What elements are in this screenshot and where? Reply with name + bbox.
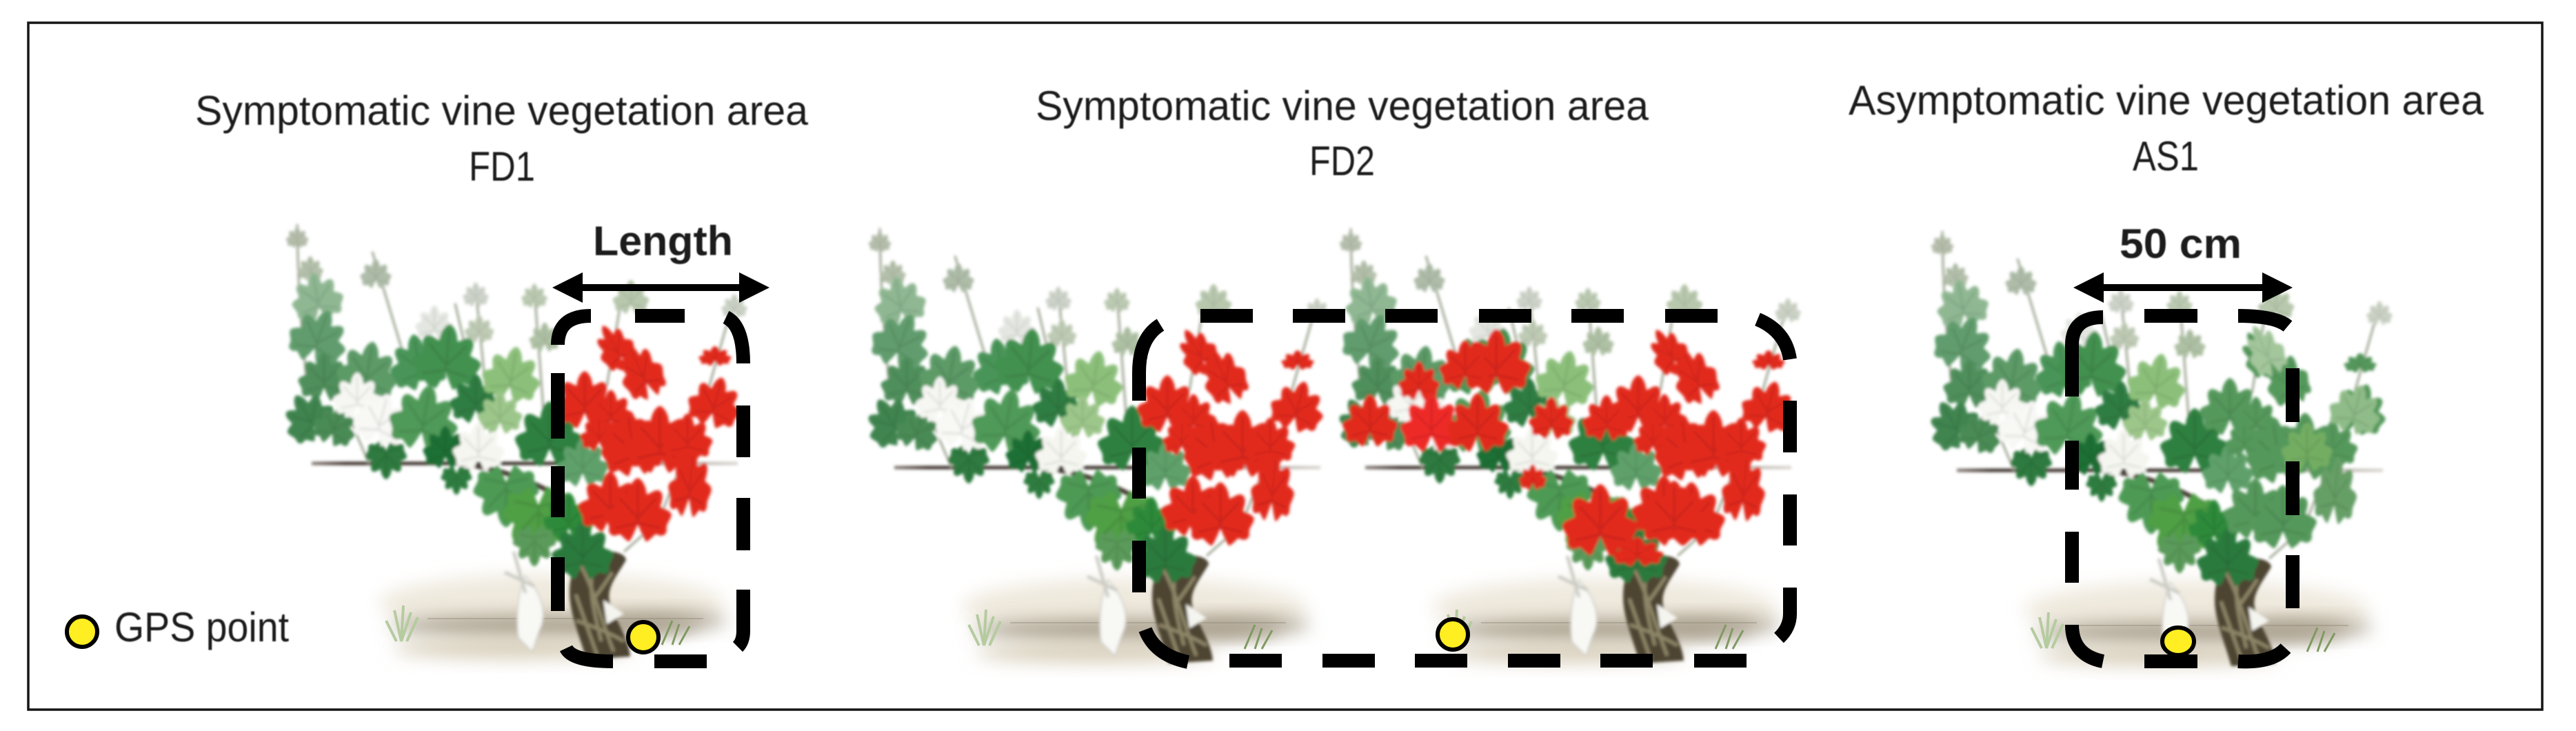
dashed vegetation area FD1: [558, 316, 743, 661]
heading: AS1: AS1: [2133, 133, 2199, 179]
heading: FD2: Symptomatic vine vegetation area: [1036, 83, 1649, 129]
illustration: left vine: [856, 228, 1331, 663]
heading: FD1: Symptomatic vine vegetation area: [195, 88, 809, 134]
legend text: GPS point: [114, 604, 289, 650]
heading: FD2: [1036, 83, 1649, 184]
illustration: right vine with extended red leaves: [1327, 228, 1802, 663]
arrow: length: [552, 272, 769, 303]
heading: AS1: [1849, 77, 2484, 179]
panel: AS1 asymptomatic vine: [1849, 77, 2484, 666]
GPS point FD2: [1438, 619, 1468, 650]
illustration: vine with red symptomatic leaves on the right: [274, 224, 748, 659]
dashed vegetation area FD2: [1139, 316, 1790, 662]
heading: FD1: [195, 88, 809, 190]
GPS point AS1: [2162, 628, 2194, 655]
legend: GPS point: [67, 604, 289, 650]
heading: FD2: FD2: [1309, 138, 1375, 184]
legend marker: [67, 617, 97, 647]
illustration: healthy green vine: [1919, 231, 2393, 666]
label: Length: Length: [593, 218, 733, 264]
label: 50 cm: 50 cm: [2120, 221, 2242, 267]
arrow: 50 cm: [2073, 272, 2293, 303]
panel: FD2 symptomatic vines: [856, 83, 1802, 663]
heading: FD1: FD1: [469, 143, 535, 190]
dashed vegetation area AS1: [2072, 316, 2293, 661]
GPS point FD1: [628, 622, 658, 652]
heading: AS1: Asymptomatic vine vegetation area: [1849, 77, 2484, 123]
panel: FD1 symptomatic vine: [195, 88, 809, 661]
